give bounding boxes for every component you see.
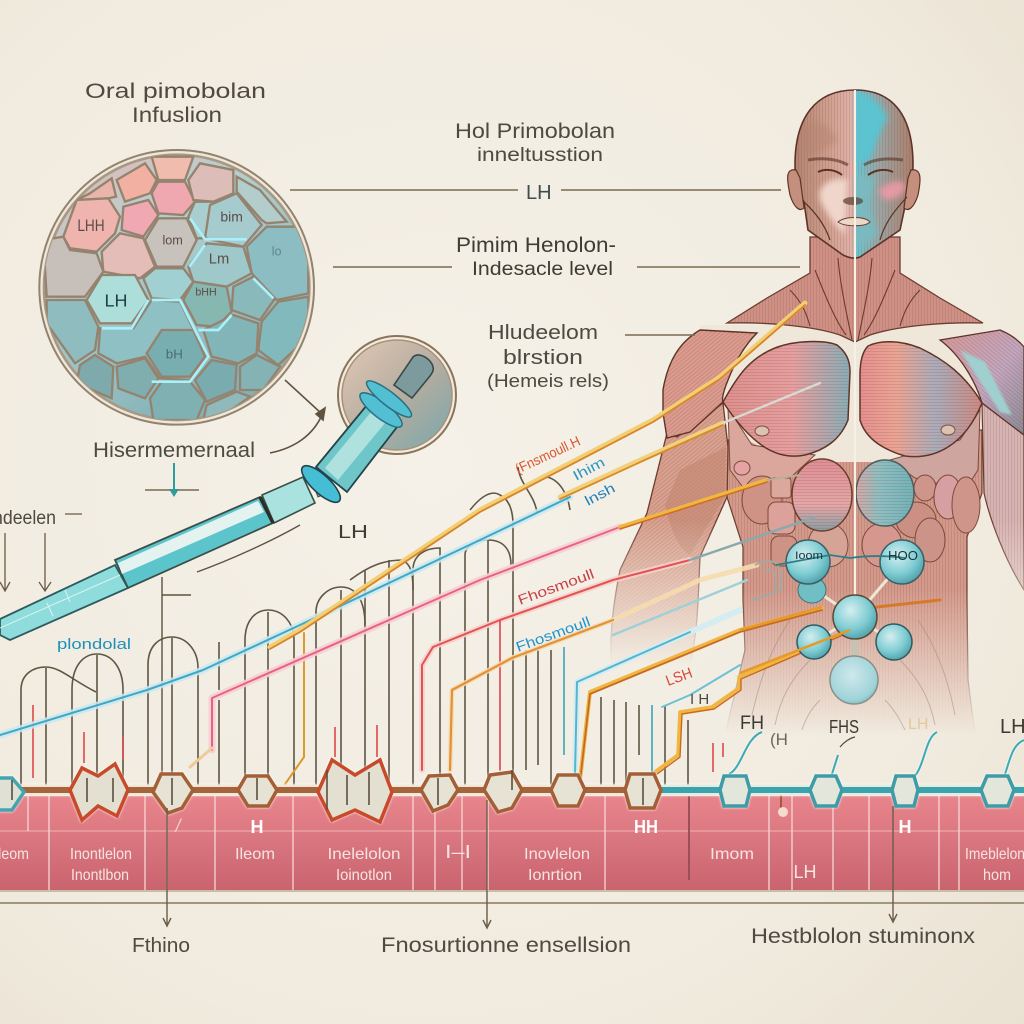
strip labels: Inontlelon	[70, 846, 132, 863]
syringe tube marks	[0, 575, 120, 628]
abdomen base	[725, 430, 982, 745]
hormone heading with leader line: Hludeelom	[488, 322, 598, 344]
molecule balls cluster: HOO	[888, 548, 918, 563]
lens panel: hexagon cells	[39, 150, 314, 425]
orange signal three	[580, 608, 822, 782]
right deltoid fibres	[940, 330, 1024, 435]
hormone labels above chain: LH	[908, 716, 928, 733]
strip labels: Inovlelon	[524, 846, 590, 863]
teal hexagons	[720, 776, 1014, 806]
strip labels: LH	[793, 862, 817, 882]
left arm	[611, 403, 728, 665]
syringe teal barrel	[115, 497, 273, 588]
signal lines	[0, 303, 940, 787]
syringe upper hatch	[325, 412, 385, 480]
strip labels: hom	[983, 867, 1011, 884]
red double hexagons	[70, 764, 128, 820]
hexagon labels: lo	[272, 244, 282, 258]
left deltoid	[663, 330, 757, 438]
pink hormone strip	[0, 788, 1024, 890]
hexagon labels: lom	[162, 233, 183, 247]
strip labels: Inelelolon	[328, 846, 400, 863]
strip labels: /	[173, 816, 182, 836]
signal labels: (Fnsmoull.H	[513, 433, 583, 477]
hexagon labels: bH	[166, 346, 183, 361]
brown hexagons	[153, 772, 661, 813]
ears	[788, 170, 920, 209]
blue signal two	[575, 610, 740, 775]
strip labels: HH	[634, 817, 658, 837]
signal labels: LSH	[664, 665, 695, 690]
hormone labels above chain: (H	[770, 730, 788, 749]
strip labels: H	[898, 817, 912, 837]
syringe dark collar	[260, 497, 273, 523]
orange signal to chest	[560, 383, 820, 499]
right abdominal muscle	[856, 460, 914, 526]
signal labels	[57, 433, 709, 708]
right deltoid	[940, 330, 1024, 435]
syringe lower tube	[0, 565, 128, 640]
nose	[843, 197, 863, 205]
hormone heading with leader line: (Hemeis rels)	[487, 371, 609, 391]
hexagon labels: bHH	[195, 287, 217, 299]
neck and trapezius	[727, 237, 983, 342]
label: hisermemernaal with arrow: Hisermemernaal	[93, 439, 255, 462]
strip labels: H	[250, 817, 264, 837]
top left title	[85, 80, 266, 127]
orange stem	[283, 633, 304, 787]
small marker near syringe	[162, 577, 191, 790]
hormone labels above chain: FHS	[829, 717, 859, 737]
syringe flange	[297, 460, 345, 508]
right abdominal fibres	[856, 460, 914, 526]
signal labels: I H	[690, 691, 709, 708]
level heading with leader line: Indesacle level	[472, 259, 613, 280]
hexagon labels: Lm	[209, 251, 229, 267]
blue signal	[0, 497, 570, 735]
LH callout with leader line: LH	[526, 182, 552, 204]
syringe barrel hatch	[118, 501, 264, 574]
top left title: Infuslion	[132, 104, 222, 127]
syringe upper barrel	[316, 405, 397, 492]
signal labels: Fhosmoull	[514, 613, 592, 655]
head	[796, 90, 912, 258]
strip labels: Ionrtion	[528, 867, 582, 884]
hole primobolan heading: inneltusstion	[477, 145, 603, 166]
syringe	[0, 355, 433, 640]
red vertical ticks	[33, 705, 723, 778]
strip dot	[780, 788, 782, 808]
bottom labels: Fthino	[132, 935, 190, 957]
baselines under strip	[0, 890, 1024, 892]
hexagon labels: LH	[104, 291, 127, 311]
center body line	[854, 90, 856, 640]
red signal	[422, 560, 690, 770]
serratus and ab segments	[728, 408, 980, 567]
right orange tip	[877, 600, 940, 607]
bottom labels: Fnosurtionne ensellsion	[381, 934, 631, 957]
hormone labels above chain	[740, 713, 1024, 749]
molecule balls cluster	[776, 540, 924, 704]
strip labels	[0, 816, 1024, 884]
level heading with leader line: Pimim Henolon-	[456, 234, 616, 257]
right arm	[982, 403, 1024, 590]
signal labels: Fhosmoull	[516, 565, 596, 608]
grey blue continuation	[690, 517, 815, 560]
left deltoid fibres	[663, 330, 757, 438]
chest cream base	[700, 325, 985, 462]
teal hexagon left	[0, 778, 24, 810]
strip labels: Ioinotlon	[336, 867, 392, 884]
orange lines over balls	[740, 607, 850, 673]
pink signal	[190, 527, 620, 767]
strip labels: I–I	[445, 842, 471, 862]
grey coil near balls	[752, 561, 782, 600]
signal labels: Ihim	[570, 454, 607, 484]
ball labels: Ioom	[795, 550, 823, 562]
syringe chamber	[262, 477, 315, 523]
strip labels: Imom	[710, 846, 754, 863]
lower belly fan lines	[752, 620, 955, 730]
strip labels: Ileom	[235, 846, 275, 863]
syringe collars	[356, 376, 415, 432]
curved arrow to syringe	[270, 380, 325, 453]
molecular chain	[0, 760, 1024, 822]
left pectoral fibres	[723, 342, 850, 456]
neck muscle lines	[790, 258, 920, 340]
neck fibres	[727, 237, 983, 342]
right pectoral	[860, 342, 982, 457]
arched vertical lines chart	[21, 467, 688, 785]
signal labels: lnsh	[582, 479, 618, 509]
hole primobolan heading: Hol Primobolan	[455, 120, 615, 143]
pointer arrows	[163, 800, 897, 928]
hormone labels above chain: FH	[740, 713, 764, 734]
inner hexagon strokes	[12, 770, 643, 810]
hexagon labels: LHH	[77, 216, 105, 235]
lips	[838, 218, 870, 226]
LH label center: LH	[338, 522, 368, 542]
hexagon labels	[77, 209, 282, 361]
hormone heading with leader line: blrstion	[503, 347, 583, 369]
hormone heading with leader line	[487, 322, 695, 391]
label: hdeelen with arrows	[0, 508, 82, 591]
blue and orange signal four	[655, 630, 850, 774]
left pectoral	[723, 342, 850, 456]
right shoulder teal band	[960, 350, 1012, 415]
right pectoral fibres	[860, 342, 982, 457]
signal labels: plondolal	[57, 636, 131, 653]
orange signal two	[450, 565, 757, 770]
nipples	[755, 425, 955, 436]
syringe connector	[312, 474, 334, 497]
strip labels: Inontlbon	[71, 867, 129, 884]
orange signal to abdomen	[620, 475, 800, 529]
teal vertical lines	[564, 647, 652, 785]
left abdominal fibres	[792, 459, 852, 531]
face features	[804, 159, 907, 240]
label: hisermemernaal with arrow	[93, 439, 255, 497]
bottom labels	[132, 925, 976, 957]
syringe seal circle	[338, 336, 456, 454]
syringe plunger	[394, 355, 433, 398]
left abdominal muscle	[792, 459, 852, 531]
red stem	[499, 620, 501, 770]
teal connector stems	[729, 732, 1024, 777]
baseline dark	[0, 902, 1024, 904]
bottom labels: Hestblolon stuminonx	[751, 925, 976, 948]
top left title: Oral pimobolan	[85, 80, 266, 103]
hole primobolan heading	[455, 120, 615, 166]
hexagon labels: bim	[220, 209, 243, 225]
glowing cell edges	[102, 218, 273, 382]
orange signal to shoulder	[270, 303, 805, 649]
syringe underline stroke	[197, 525, 300, 572]
human figure	[611, 85, 1024, 745]
level heading with leader line	[333, 234, 800, 280]
head outline	[795, 90, 913, 258]
